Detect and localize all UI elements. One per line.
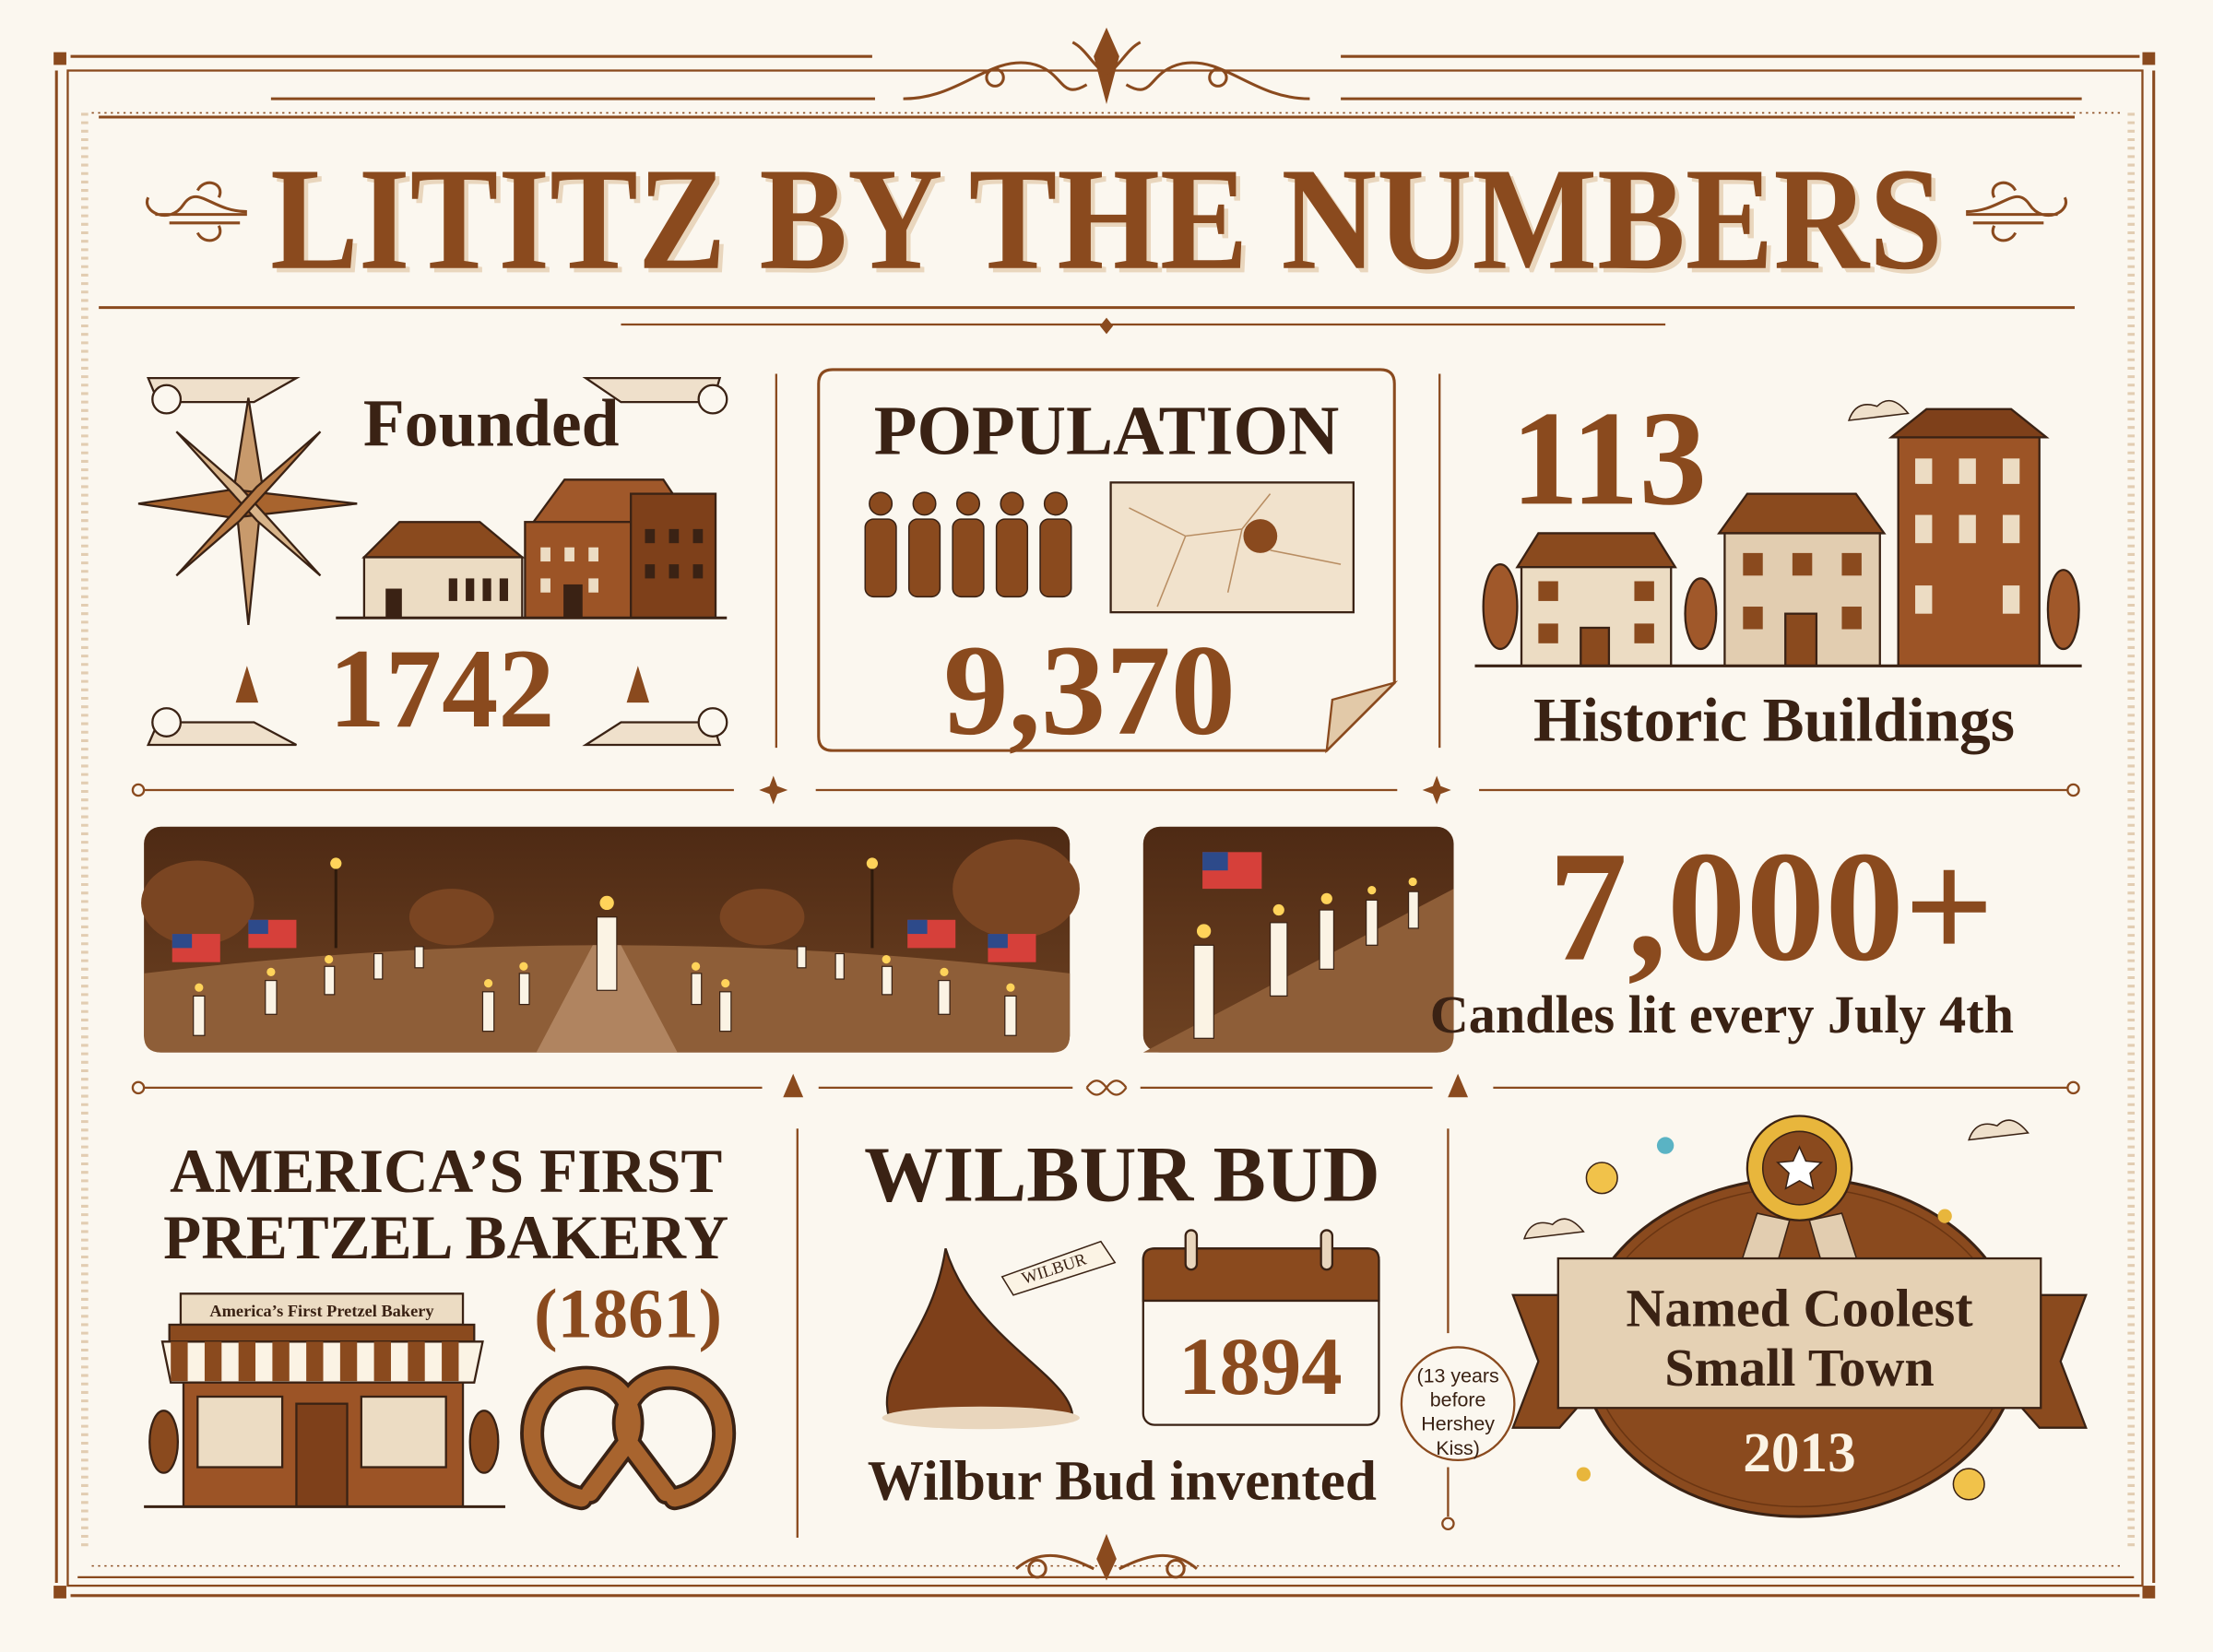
panel: historic buildings: Historic Buildings — [1533, 685, 2015, 754]
panel: pretzel bakery: AMERICA’S FIRST — [170, 1137, 722, 1206]
callout: before — [1430, 1389, 1485, 1411]
panel: founded — [138, 378, 727, 751]
title: LITITZ BY THE NUMBERS — [275, 142, 1947, 304]
callout: Hershey — [1421, 1413, 1495, 1435]
icon: calendar 1894: 1894 — [1178, 1322, 1343, 1412]
icon: people — [865, 492, 1071, 596]
title: LITITZ BY THE NUMBERS — [270, 138, 1943, 301]
panel: historic buildings — [1474, 383, 2082, 754]
panel: pretzel bakery: PRETZEL BAKERY — [163, 1203, 728, 1272]
icon: storefront — [144, 1293, 505, 1506]
icon: chocolate bud — [882, 1242, 1115, 1429]
title rules — [99, 117, 2075, 333]
icon: chocolate bud: WILBUR — [1020, 1249, 1089, 1288]
stat: candles: Candles lit every July 4th — [1430, 985, 2014, 1044]
icon: map — [1111, 482, 1354, 612]
number 1742: 1742 — [329, 627, 555, 751]
panel: coolest small town badge: 2013 — [1743, 1422, 1856, 1484]
image: candles close-up — [1143, 827, 1454, 1053]
panel: pretzel bakery: (1861) — [534, 1275, 722, 1353]
panel: wilbur bud — [864, 1130, 1514, 1513]
panel: population: POPULATION — [874, 392, 1339, 470]
icon: compass star — [138, 398, 357, 625]
panel: population: 9,370 — [943, 620, 1236, 762]
panel: coolest small town badge — [1513, 401, 2086, 1516]
icon: storefront: America’s First Pretzel Bakery — [209, 1302, 434, 1320]
panel: historic buildings: 113 — [1511, 383, 1707, 533]
icon: buildings — [1474, 409, 2082, 666]
callout — [1402, 1347, 1514, 1460]
icon: calendar 1894 — [1143, 1230, 1379, 1425]
dividers row1 — [133, 374, 2079, 801]
panel: pretzel bakery — [144, 1137, 728, 1506]
callout: Kiss) — [1436, 1437, 1480, 1459]
panel: coolest small town badge: Small Town — [1664, 1338, 1935, 1398]
callout: (13 years — [1417, 1365, 1499, 1387]
bottom ornament — [1016, 1538, 1197, 1577]
icon: pretzel — [532, 1378, 724, 1498]
panel: wilbur bud: WILBUR BUD — [864, 1130, 1380, 1218]
panel: wilbur bud: Wilbur Bud invented — [868, 1450, 1377, 1513]
scroll ornaments — [148, 378, 727, 745]
panel: coolest small town badge: Named Coolest — [1626, 1279, 1973, 1338]
image: candle path scene — [141, 827, 1080, 1053]
panel: population — [819, 370, 1394, 762]
dividers row2 — [133, 1077, 2079, 1538]
stat: candles — [1430, 820, 2014, 1044]
stat: candles: 7,000+ — [1548, 820, 1994, 995]
icon: houses — [336, 479, 727, 618]
top ornament — [904, 31, 1309, 99]
panel: founded: Founded — [363, 386, 620, 461]
